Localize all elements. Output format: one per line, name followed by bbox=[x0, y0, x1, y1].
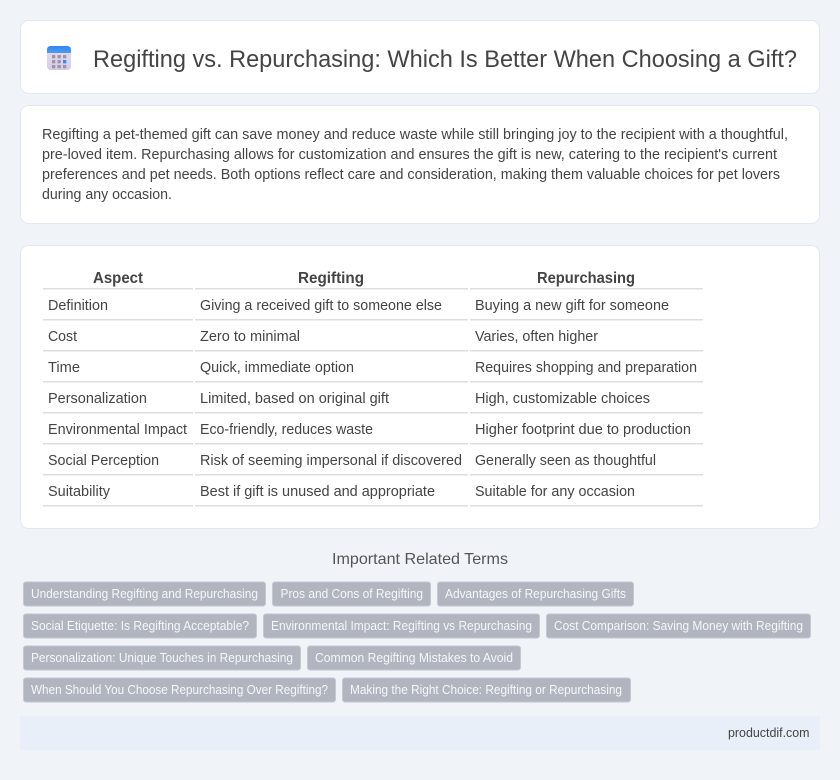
table header row: Repurchasing bbox=[537, 270, 635, 287]
tag: right choice: Making the Right Choice: Regifting or Repurchasing bbox=[350, 683, 622, 697]
tag: advantages bbox=[438, 582, 634, 606]
table header row: Regifting bbox=[298, 270, 364, 287]
table row: social perception: Social Perception bbox=[48, 453, 159, 469]
tag: right choice bbox=[342, 678, 630, 702]
table row: cost bbox=[48, 329, 598, 345]
tag: environmental impact: Environmental Impact: Regifting vs Repurchasing bbox=[271, 619, 532, 633]
tag: environmental impact bbox=[264, 614, 540, 638]
footer bar bbox=[20, 716, 820, 750]
heading: important related terms: Important Related Terms bbox=[332, 551, 508, 568]
table header row bbox=[93, 270, 635, 287]
tag: when to choose: When Should You Choose Repurchasing Over Regifting? bbox=[31, 683, 328, 697]
table row: personalization: Personalization bbox=[48, 391, 147, 407]
table row: social perception: Risk of seeming impersonal if discovered bbox=[200, 453, 462, 469]
table row: environmental impact: Environmental Impact bbox=[48, 422, 187, 438]
tag: pros and cons: Pros and Cons of Regifting bbox=[280, 587, 423, 601]
icon: calendar bbox=[47, 46, 71, 70]
tag: pros and cons bbox=[272, 582, 430, 606]
table row: time: Requires shopping and preparation bbox=[475, 360, 697, 376]
tag: personalization bbox=[24, 646, 300, 670]
title: Regifting vs. Repurchasing: Which Is Better When Choosing a Gift? bbox=[93, 46, 797, 73]
tag: understanding bbox=[24, 582, 266, 606]
table row: personalization bbox=[48, 391, 650, 407]
table row: definition bbox=[48, 298, 669, 314]
table row: time bbox=[48, 360, 697, 376]
table row: personalization: High, customizable choices bbox=[475, 391, 650, 407]
table row: suitability: Best if gift is unused and appropriate bbox=[200, 484, 435, 500]
tag: advantages: Advantages of Repurchasing Gifts bbox=[445, 587, 626, 601]
panel: page header bbox=[20, 20, 820, 94]
tag: common mistakes bbox=[308, 646, 520, 670]
footer source text: productdif.com bbox=[728, 726, 810, 740]
table row: environmental impact bbox=[48, 422, 691, 438]
tag: common mistakes: Common Regifting Mistakes to Avoid bbox=[315, 651, 513, 665]
text block: introduction paragraph: preferences and pet needs. Both options reflect care and consideration, making them valuable choices for pet lovers bbox=[42, 167, 780, 183]
table row: suitability bbox=[48, 484, 635, 500]
tag: personalization: Personalization: Unique Touches in Repurchasing bbox=[31, 651, 293, 665]
table row: environmental impact: Higher footprint due to production bbox=[475, 422, 691, 438]
tag: cost comparison: Cost Comparison: Saving Money with Regifting bbox=[554, 619, 803, 633]
tag: social etiquette bbox=[24, 614, 256, 638]
text block: introduction paragraph: pre-loved item. Repurchasing allows for customization and ensures the gift is new, catering to the recipient's current bbox=[42, 147, 777, 163]
related terms tags bbox=[24, 582, 810, 702]
text block: introduction paragraph bbox=[42, 127, 788, 203]
table row: social perception bbox=[48, 453, 656, 469]
tag: cost comparison bbox=[546, 614, 810, 638]
panel: introduction bbox=[20, 106, 820, 224]
table header row: Aspect bbox=[93, 270, 144, 287]
tag: when to choose bbox=[24, 678, 336, 702]
panel: comparison table bbox=[20, 246, 820, 528]
text block: introduction paragraph: during any occasion. bbox=[42, 187, 172, 203]
table row: definition: Giving a received gift to someone else bbox=[200, 298, 442, 314]
table row: social perception: Generally seen as thoughtful bbox=[475, 453, 656, 469]
tag: social etiquette: Social Etiquette: Is Regifting Acceptable? bbox=[31, 619, 249, 633]
table row: definition: Definition bbox=[48, 298, 108, 314]
text block: introduction paragraph: Regifting a pet-themed gift can save money and reduce waste while still bringing joy to the recipient with a thoughtful, bbox=[42, 127, 788, 143]
table row: time: Quick, immediate option bbox=[200, 360, 354, 376]
tag: understanding: Understanding Regifting and Repurchasing bbox=[31, 587, 258, 601]
table row: cost: Varies, often higher bbox=[475, 329, 598, 345]
table row: suitability: Suitability bbox=[48, 484, 111, 500]
table row: environmental impact: Eco-friendly, reduces waste bbox=[200, 422, 373, 438]
table row: personalization: Limited, based on original gift bbox=[200, 391, 389, 407]
table row: time: Time bbox=[48, 360, 80, 376]
table row: suitability: Suitable for any occasion bbox=[475, 484, 635, 500]
table row: definition: Buying a new gift for someone bbox=[475, 298, 669, 314]
table row: cost: Zero to minimal bbox=[200, 329, 300, 345]
table row: cost: Cost bbox=[48, 329, 77, 345]
